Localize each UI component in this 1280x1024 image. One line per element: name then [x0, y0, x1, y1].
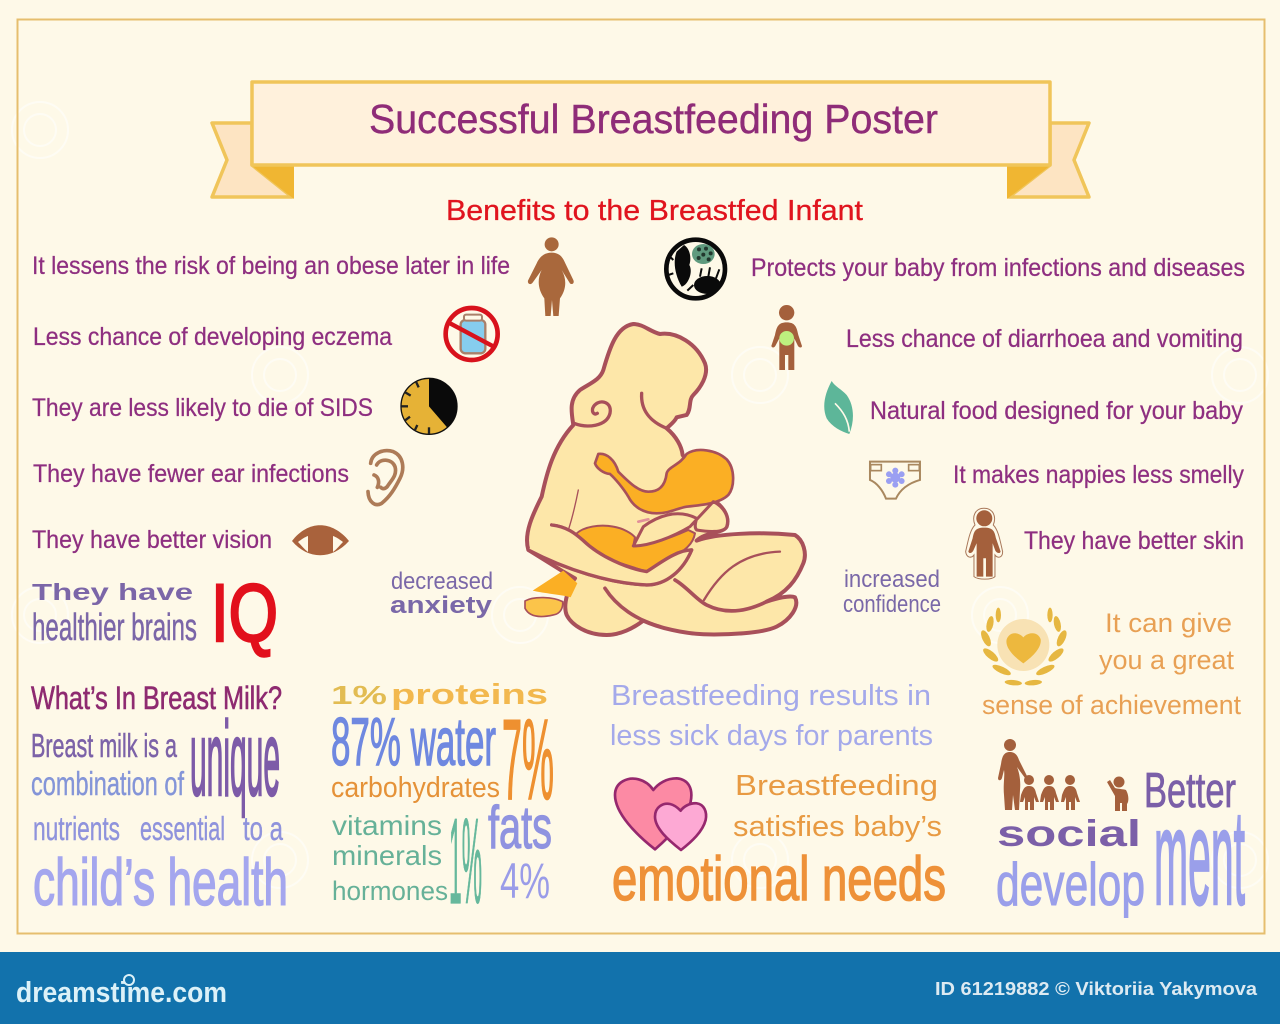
right benefits list: It makes nappies less smelly	[953, 461, 1244, 489]
panel: milk composition: 1%	[331, 680, 387, 710]
icon: obese person	[528, 237, 574, 316]
icon: leaf	[824, 381, 853, 434]
title ribbon	[212, 82, 1089, 199]
footer logo: dreamstime.com	[16, 977, 227, 1009]
panel: milk composition	[331, 679, 554, 929]
footer bar	[0, 952, 1280, 1024]
text: less sick days: less sick days for parents	[610, 720, 933, 752]
right benefits list: Protects your baby from infections and diseases	[751, 254, 1245, 282]
panel: what's in breast milk: nutrients	[33, 810, 120, 847]
left benefits list: They have better vision	[32, 526, 272, 554]
panel: what's in breast milk	[31, 680, 288, 919]
baby body	[576, 526, 695, 572]
baby head and arm	[595, 450, 733, 513]
panel: milk composition: minerals	[332, 840, 442, 871]
icon: child with upset stomach	[771, 305, 802, 370]
panel: milk composition: 87% water	[331, 704, 496, 780]
text: sense of achievement	[982, 608, 1241, 720]
baby leg and foot	[533, 571, 577, 597]
text: healthier brains: They have	[32, 579, 193, 605]
text: decreased anxiety: anxiety	[390, 592, 493, 619]
text: IQ: IQ	[211, 568, 278, 659]
icon: family group	[998, 739, 1128, 811]
text: 7%	[502, 697, 554, 824]
panel: what's in breast milk: to a	[243, 810, 283, 847]
heading: benefits: Benefits to the Breastfed Infant	[446, 195, 863, 227]
title: Successful Breastfeeding Poster	[369, 96, 938, 142]
panel: milk composition: fats	[488, 794, 552, 861]
text: unique	[190, 700, 280, 818]
panel: what's in breast milk: What’s In Breast Milk?	[31, 680, 282, 716]
left benefits list: They have fewer ear infections	[33, 460, 349, 488]
text: sense of achievement: sense of achievement	[982, 690, 1241, 720]
icon: crossed-out bottle	[446, 308, 498, 360]
text: emotional needs: Breastfeeding	[735, 770, 938, 802]
panel: milk composition: hormones	[332, 876, 448, 906]
left benefits list: They are less likely to die of SIDS	[32, 394, 373, 422]
panel: milk composition: carbohydrates	[331, 772, 500, 804]
panel: what's in breast milk: Breast milk is a	[31, 727, 177, 764]
left benefits list	[32, 252, 510, 554]
mother's arm and legs	[528, 525, 692, 585]
icon: clock	[401, 378, 457, 434]
right benefits list	[751, 254, 1245, 555]
text: decreased anxiety: decreased	[391, 568, 493, 595]
text: sense of achievement: It can give	[1105, 608, 1232, 638]
panel: milk composition: 4%	[500, 853, 550, 909]
panel: what's in breast milk: essential	[140, 810, 225, 847]
icon: ear	[368, 451, 403, 505]
text: less sick days: Breastfeeding results in	[611, 680, 931, 712]
icon: child with healthy skin	[966, 508, 1003, 579]
panel: what's in breast milk: combination of	[31, 765, 185, 802]
panel: milk composition: vitamins	[332, 810, 442, 841]
text: emotional needs: emotional needs	[612, 845, 946, 914]
text: decreased anxiety	[390, 568, 493, 619]
text: healthier brains	[32, 579, 197, 649]
right benefits list: They have better skin	[1024, 527, 1244, 555]
text: less sick days	[610, 680, 933, 752]
text: emotional needs	[612, 770, 946, 914]
text: better social development	[996, 764, 1245, 933]
left benefits list: It lessens the risk of being an obese later in life	[32, 252, 510, 280]
text: better social development: develop	[996, 851, 1145, 918]
icon: hearts	[615, 778, 706, 850]
text: sense of achievement: you a great	[1099, 645, 1234, 675]
left benefits list: Less chance of developing eczema	[33, 323, 392, 351]
icon: laurel and heart	[979, 608, 1069, 686]
illustration: mother breastfeeding baby	[525, 324, 805, 635]
right benefits list: Less chance of diarrhoea and vomiting	[846, 325, 1243, 353]
text: better social development: social	[997, 813, 1141, 854]
icon: eye	[292, 525, 349, 555]
text: increased confidence: confidence	[843, 591, 941, 618]
text: increased confidence	[843, 566, 941, 618]
text: increased confidence: increased	[844, 566, 940, 593]
panel: milk composition: 1%	[449, 793, 482, 929]
panel: what's in breast milk: child’s health	[33, 845, 288, 919]
text: better social development: Better	[1144, 764, 1236, 818]
panel: milk composition: proteins	[391, 679, 548, 711]
footer credit: ID 61219882 © Viktoriia Yakymova	[935, 979, 1258, 999]
right benefits list: Natural food designed for your baby	[870, 397, 1243, 425]
text: emotional needs: satisfies baby’s	[733, 811, 942, 843]
text: healthier brains: healthier brains	[32, 607, 197, 649]
icon: germs	[666, 240, 725, 298]
icon: nappy	[870, 462, 920, 499]
